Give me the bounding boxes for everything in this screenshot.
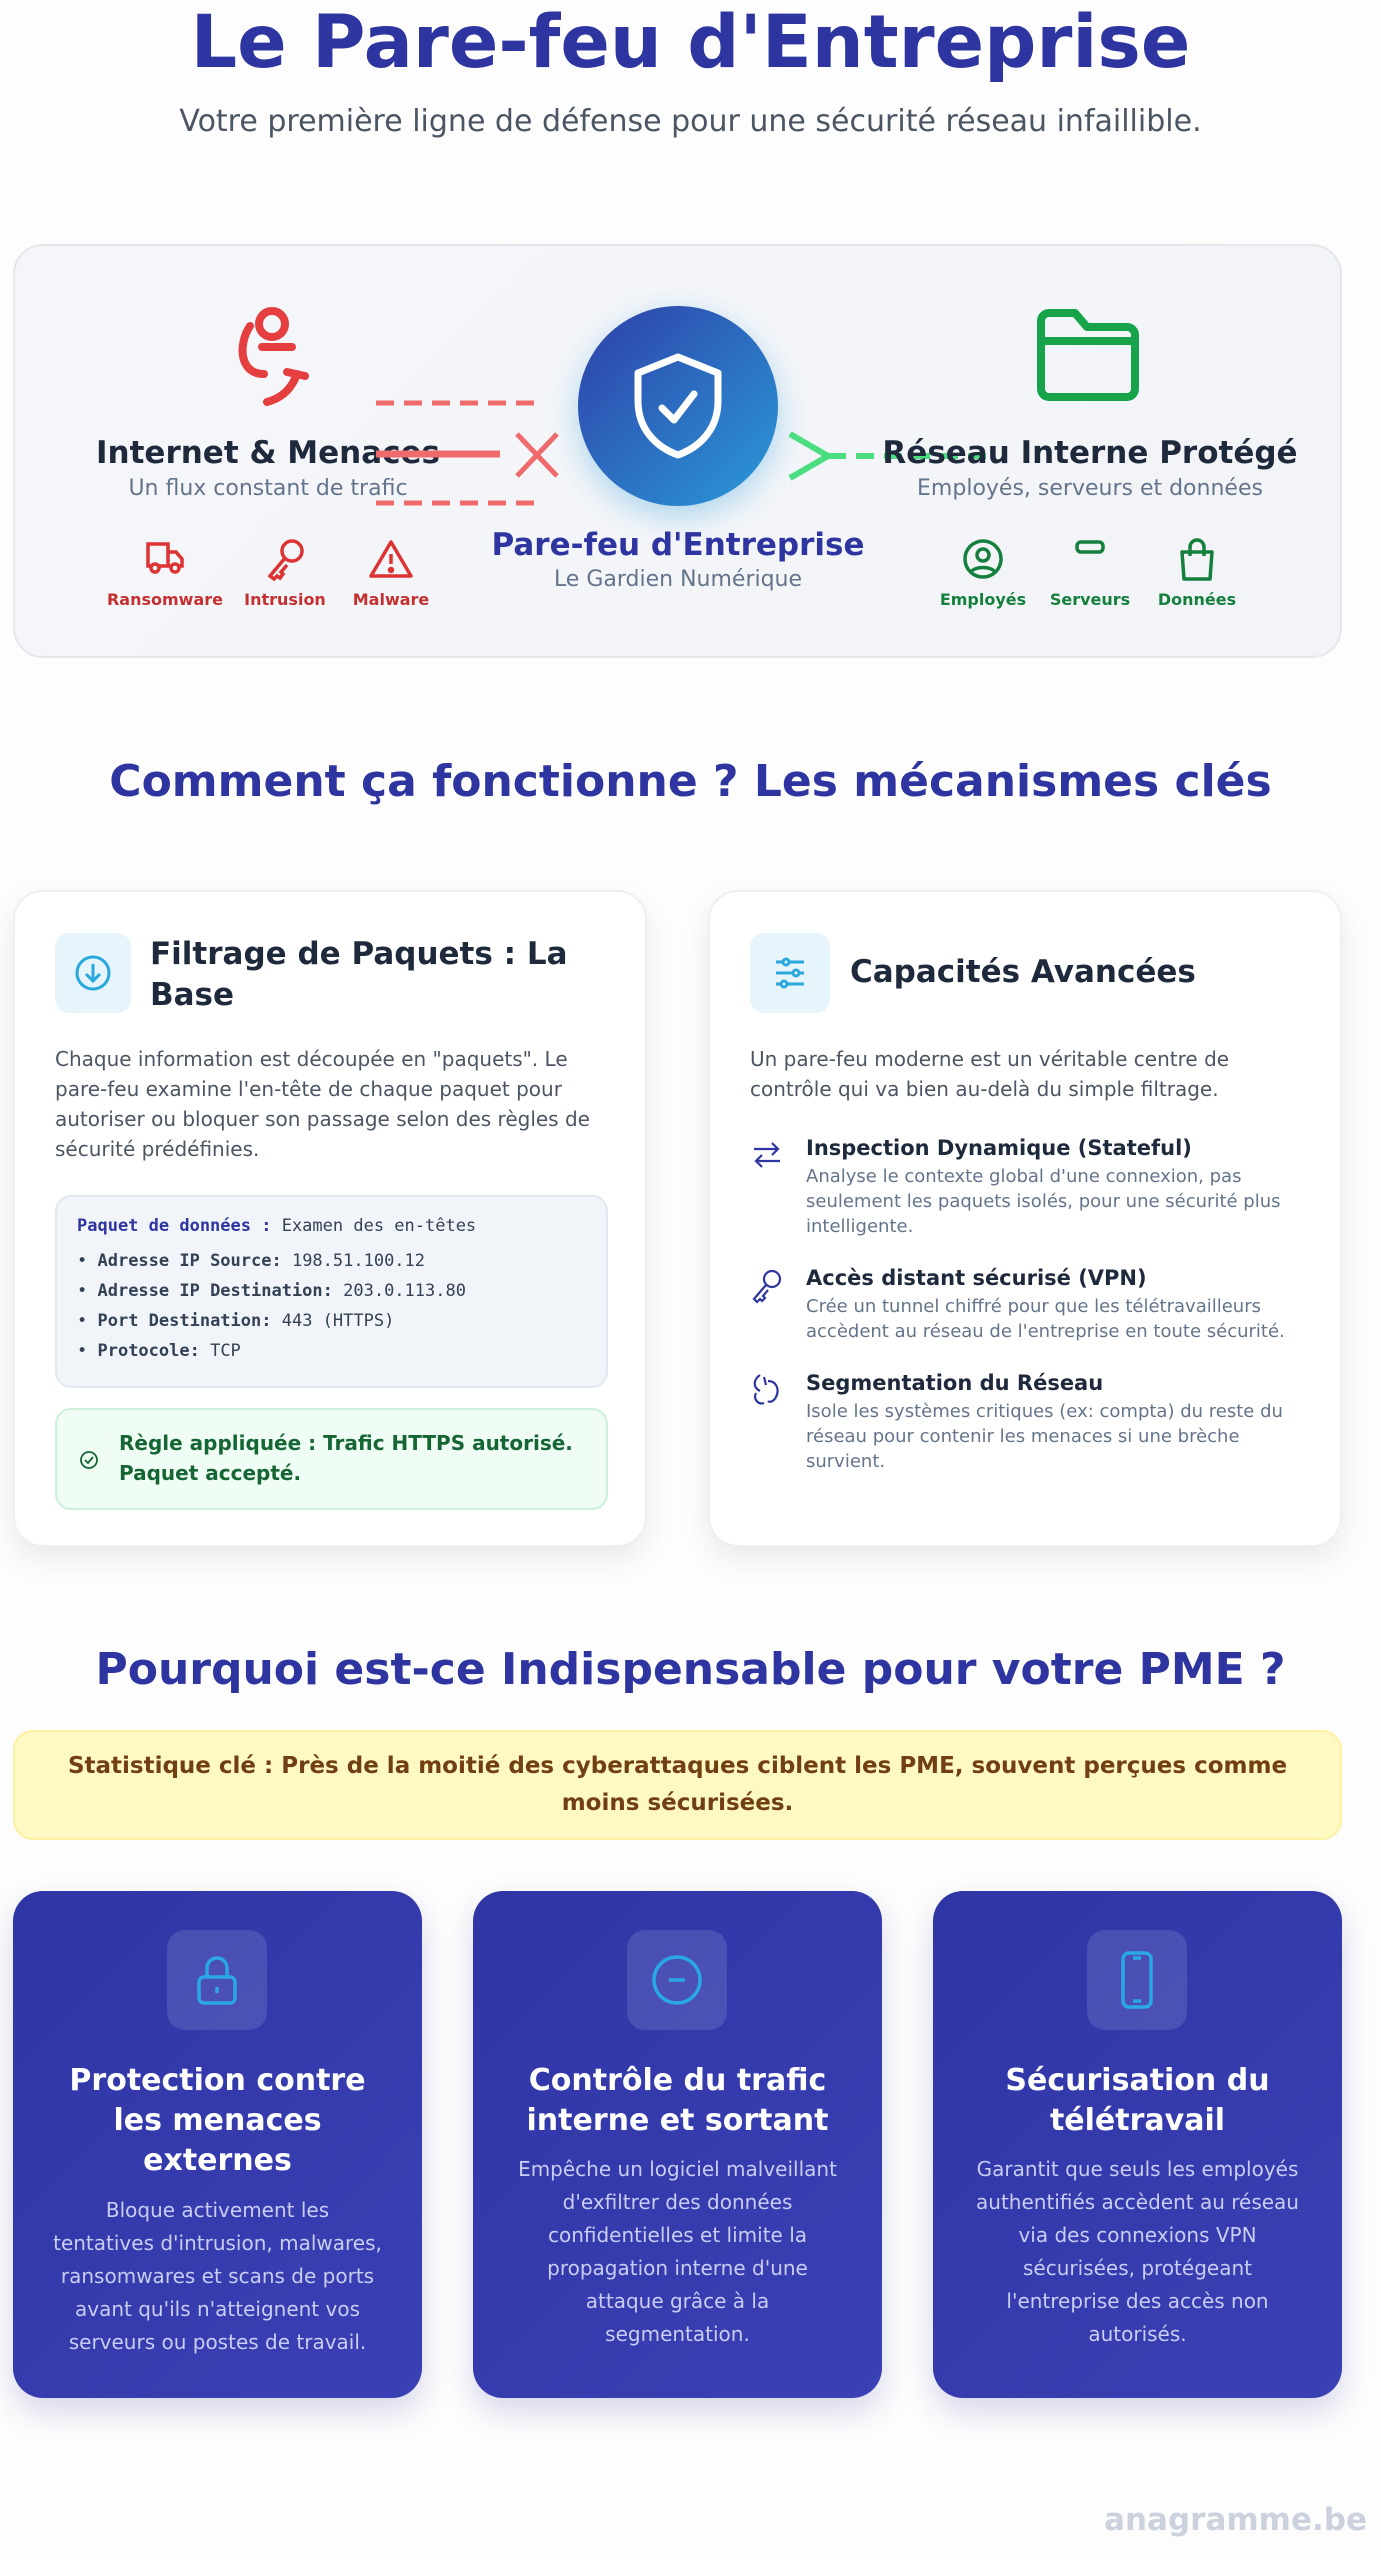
code box: packet: [55, 1195, 608, 1388]
callout: rule applied: [55, 1408, 608, 1510]
asset: données: [1158, 538, 1236, 609]
card text: serveurs ou postes de travail.: [69, 2330, 366, 2354]
card title: [1005, 2063, 1270, 2138]
item: stateful: Inspection Dynamique (Stateful): [806, 1136, 1192, 1160]
footer: brand: anagramme.be: [1104, 2502, 1367, 2538]
title: Le Pare-feu d'Entreprise: [191, 0, 1190, 85]
callout: rule applied: Règle appliquée : Trafic HTTPS autorisé. Paquet accepté.: [119, 1431, 573, 1485]
text: employés: Employés, serveurs et données: [917, 476, 1263, 501]
code box: packet: Paquet de données : Examen des en-têtes: [77, 1216, 476, 1236]
code box: packet: • Protocole: TCP: [77, 1341, 241, 1361]
icon: minus circle: [627, 1930, 727, 2030]
panel: hero diagram: [13, 244, 1342, 658]
item: VPN: Accès distant sécurisé (VPN): [806, 1266, 1147, 1290]
card text: attaque grâce à la: [586, 2289, 769, 2313]
card text: authentifiés accèdent au réseau: [976, 2190, 1299, 2214]
card title: Capacités Avancées: [850, 954, 1196, 990]
card text: avant qu'ils n'atteignent vos: [75, 2297, 360, 2321]
threat: intrusion: Intrusion: [244, 590, 326, 609]
card text: segmentation.: [605, 2322, 750, 2346]
card title: Filtrage de Paquets : La Base: [150, 936, 568, 1013]
item: segmentation: [754, 1371, 1283, 1472]
card title: télétravail: [1050, 2103, 1225, 2138]
icon: lock: [167, 1930, 267, 2030]
callout: statistique: moins sécurisées.: [562, 1790, 793, 1816]
card title: Contrôle du trafic: [529, 2063, 826, 2098]
label: Internet & Menaces: Internet & Menaces: [96, 435, 440, 471]
asset: employés: [940, 539, 1026, 609]
card text: [976, 2157, 1299, 2346]
card title: les menaces: [113, 2103, 322, 2138]
icon: firewall shield: [578, 306, 778, 506]
card text: d'exfiltrer des données: [563, 2190, 792, 2214]
threat: malware: Malware: [353, 590, 429, 609]
asset: employés: Employés: [940, 590, 1026, 609]
card text: tentatives d'intrusion, malwares,: [53, 2231, 382, 2255]
item: stateful: Analyse le contexte global d'une connexion, pas seulement les paquets isolés, pour une sécurité plus intelligente.: [806, 1166, 1281, 1237]
panel: capacités avancées: [708, 890, 1342, 1547]
card text: ransomwares et scans de ports: [61, 2264, 374, 2288]
callout: statistique: Statistique clé : Près de la moitié des cyberattaques ciblent les PME, souvent perçues comme: [68, 1753, 1287, 1779]
item: VPN: [752, 1266, 1285, 1342]
item: stateful: [754, 1136, 1281, 1237]
text: flux: Un flux constant de trafic: [128, 476, 408, 501]
assets list: [940, 538, 1236, 609]
code box: packet: • Adresse IP Source: 198.51.100.12: [77, 1251, 425, 1271]
asset: serveurs: Serveurs: [1050, 590, 1130, 609]
icon: phone: [1087, 1930, 1187, 2030]
code box: packet: • Port Destination: 443 (HTTPS): [77, 1311, 394, 1331]
card text: [518, 2157, 837, 2346]
threats list: [107, 539, 429, 609]
panel: filtrage de paquets: [13, 890, 647, 1547]
item: segmentation: Segmentation du Réseau: [806, 1371, 1103, 1395]
card title: externes: [143, 2143, 292, 2178]
card title: Protection contre: [69, 2063, 366, 2098]
threat: malware: [353, 540, 429, 609]
threat: ransomware: Ransomware: [107, 590, 223, 609]
heading: mécanismes: Comment ça fonctionne ? Les mécanismes clés: [109, 756, 1272, 807]
card text: propagation interne d'une: [547, 2256, 808, 2280]
card title: [527, 2063, 828, 2138]
label: Réseau Interne: Réseau Interne Protégé: [882, 435, 1298, 471]
item: segmentation: Isole les systèmes critiques (ex: compta) du reste du réseau pour contenir les menaces si une brèche survient.: [806, 1401, 1283, 1472]
card title: [69, 2063, 366, 2178]
panel: contrôle: [473, 1891, 882, 2398]
code box: packet: • Adresse IP Destination: 203.0.113.80: [77, 1281, 466, 1301]
card text: [53, 2198, 382, 2354]
arrow: allowed traffic: [788, 431, 986, 481]
card title: interne et sortant: [527, 2103, 828, 2138]
threat: ransomware: [107, 542, 223, 609]
card text: Garantit que seuls les employés: [977, 2157, 1298, 2181]
card text: Bloque activement les: [106, 2198, 329, 2222]
panel: télétravail: [933, 1891, 1342, 2398]
asset: serveurs: [1050, 540, 1130, 609]
icon: download: [55, 933, 131, 1013]
paragraph: Un pare-feu moderne est un véritable centre de contrôle qui va bien au-delà du simple filtrage.: [750, 1047, 1229, 1101]
text: gardien: Le Gardien Numérique: [554, 567, 802, 592]
panel: protection: [13, 1891, 422, 2398]
heading: pourquoi: Pourquoi est-ce Indispensable pour votre PME ?: [95, 1644, 1286, 1695]
callout: statistique: [13, 1730, 1342, 1840]
subtitle: Votre première ligne de défense pour une sécurité réseau infaillible.: [179, 104, 1202, 139]
threat: intrusion: [244, 539, 326, 609]
asset: données: Données: [1158, 590, 1236, 609]
card text: via des connexions VPN: [1018, 2223, 1257, 2247]
card text: Empêche un logiciel malveillant: [518, 2157, 837, 2181]
label: Pare-feu: Pare-feu d'Entreprise: [492, 527, 864, 563]
item: VPN: Crée un tunnel chiffré pour que les télétravailleurs accèdent au réseau de l'entreprise en toute sécurité.: [806, 1296, 1285, 1342]
card text: confidentielles et limite la: [548, 2223, 807, 2247]
icon: folder: [1037, 309, 1139, 401]
paragraph: Chaque information est découpée en "paquets". Le pare-feu examine l'en-tête de chaque paquet pour autoriser ou bloquer son passage selon des règles de sécurité prédéfinies.: [55, 1047, 590, 1161]
card text: autorisés.: [1088, 2322, 1187, 2346]
arrows: blocked threats: [376, 400, 559, 506]
icon: threat: [238, 307, 309, 406]
card text: l'entreprise des accès non: [1006, 2289, 1269, 2313]
card title: Sécurisation du: [1005, 2063, 1270, 2098]
card text: sécurisées, protégeant: [1023, 2256, 1252, 2280]
icon: sliders: [750, 933, 830, 1013]
